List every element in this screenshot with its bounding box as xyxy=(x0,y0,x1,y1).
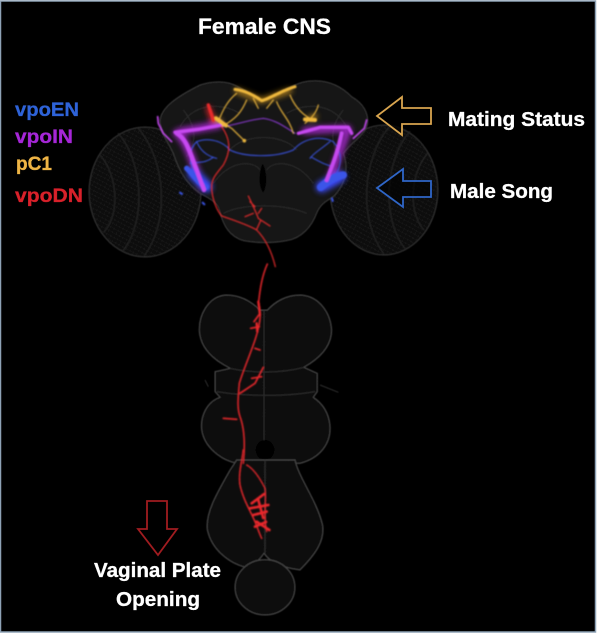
arrow: mating status input xyxy=(377,97,431,135)
label: vaginal plate opening: Vaginal Plate xyxy=(94,560,221,582)
label: mating status: Mating Status xyxy=(448,109,585,131)
neuron: pC1 gold xyxy=(216,87,318,142)
abdominal segments xyxy=(207,460,323,615)
neuron: vpoEN blue xyxy=(180,138,343,204)
legend: vpoIN: vpoIN xyxy=(15,127,73,148)
glow xyxy=(177,91,348,187)
left optic lobe xyxy=(89,127,201,257)
central brain xyxy=(160,81,368,243)
title: Female CNS xyxy=(198,14,331,39)
legend: pC1: pC1 xyxy=(16,154,52,175)
neuron: vpoDN red xyxy=(208,105,275,267)
ventral nerve cord xyxy=(199,295,338,615)
central slit xyxy=(259,163,266,193)
legend xyxy=(15,100,83,207)
neuron: vpoIN purple xyxy=(158,117,367,190)
right optic lobe xyxy=(330,125,438,255)
legend: vpoDN: vpoDN xyxy=(15,186,83,207)
neuron: vpoDN descending axon in nerve cord xyxy=(223,264,269,538)
label: vaginal plate opening xyxy=(94,560,221,611)
neurons in brain xyxy=(158,87,367,267)
legend: vpoEN: vpoEN xyxy=(15,100,79,121)
arrow: vaginal plate output xyxy=(138,501,177,555)
label: vaginal plate opening: Opening xyxy=(116,589,200,611)
label: male song: Male Song xyxy=(450,181,553,203)
brain xyxy=(89,81,438,257)
arrow: male song input xyxy=(377,169,431,207)
thoracic segments xyxy=(199,295,338,463)
